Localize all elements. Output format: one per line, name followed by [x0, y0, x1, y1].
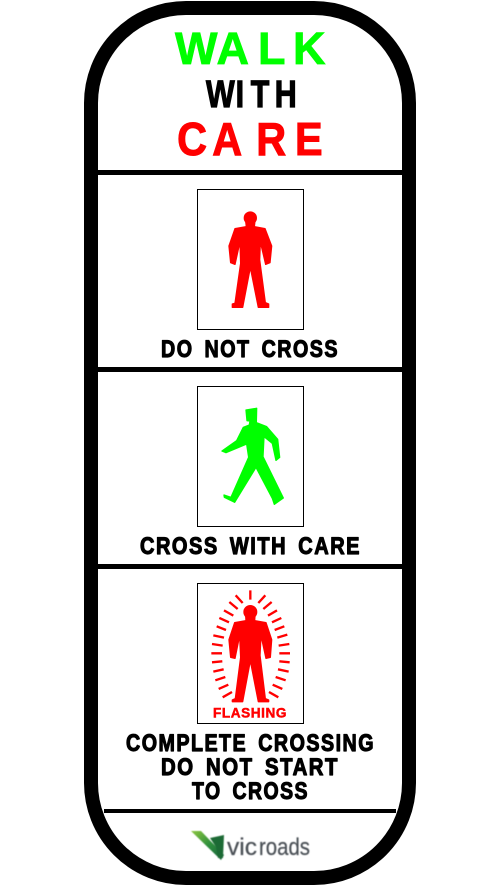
- sign outline: [91, 8, 409, 878]
- signal box: red standing figure: [198, 190, 304, 330]
- label: complete crossing instructions: [126, 730, 375, 805]
- divider lines: [98, 170, 402, 813]
- title: walk: WALK: [175, 23, 326, 74]
- label: do not cross: DO NOT CROSS: [161, 336, 339, 363]
- icon: flashing rays: [211, 590, 290, 697]
- title: care: CARE: [177, 114, 323, 166]
- signal box: flashing red figure: [198, 584, 304, 724]
- icon: flashing red figure: [229, 606, 272, 702]
- icon: green walking figure: [222, 408, 283, 504]
- panel: do not cross: [161, 190, 339, 363]
- label: complete crossing instructions: DO NOT START: [161, 754, 339, 781]
- label: complete crossing instructions: COMPLETE CROSSING: [126, 730, 375, 757]
- title: [175, 23, 326, 166]
- signal box: green walking figure: [198, 386, 304, 526]
- label: cross with care: CROSS WITH CARE: [140, 533, 361, 560]
- logo wordmark: [227, 834, 310, 861]
- icon: red standing figure: [229, 212, 272, 307]
- title: with: WITH: [206, 74, 297, 116]
- logo: vicroads: [191, 831, 310, 861]
- panel: cross with care: [140, 386, 361, 560]
- flashing caption: FLASHING: [213, 704, 287, 720]
- logo wordmark: roads: [259, 834, 310, 861]
- logo mark: [191, 831, 224, 860]
- label: complete crossing instructions: TO CROSS: [192, 778, 309, 805]
- logo wordmark: vic: [227, 834, 257, 861]
- panel: complete crossing: [126, 584, 375, 805]
